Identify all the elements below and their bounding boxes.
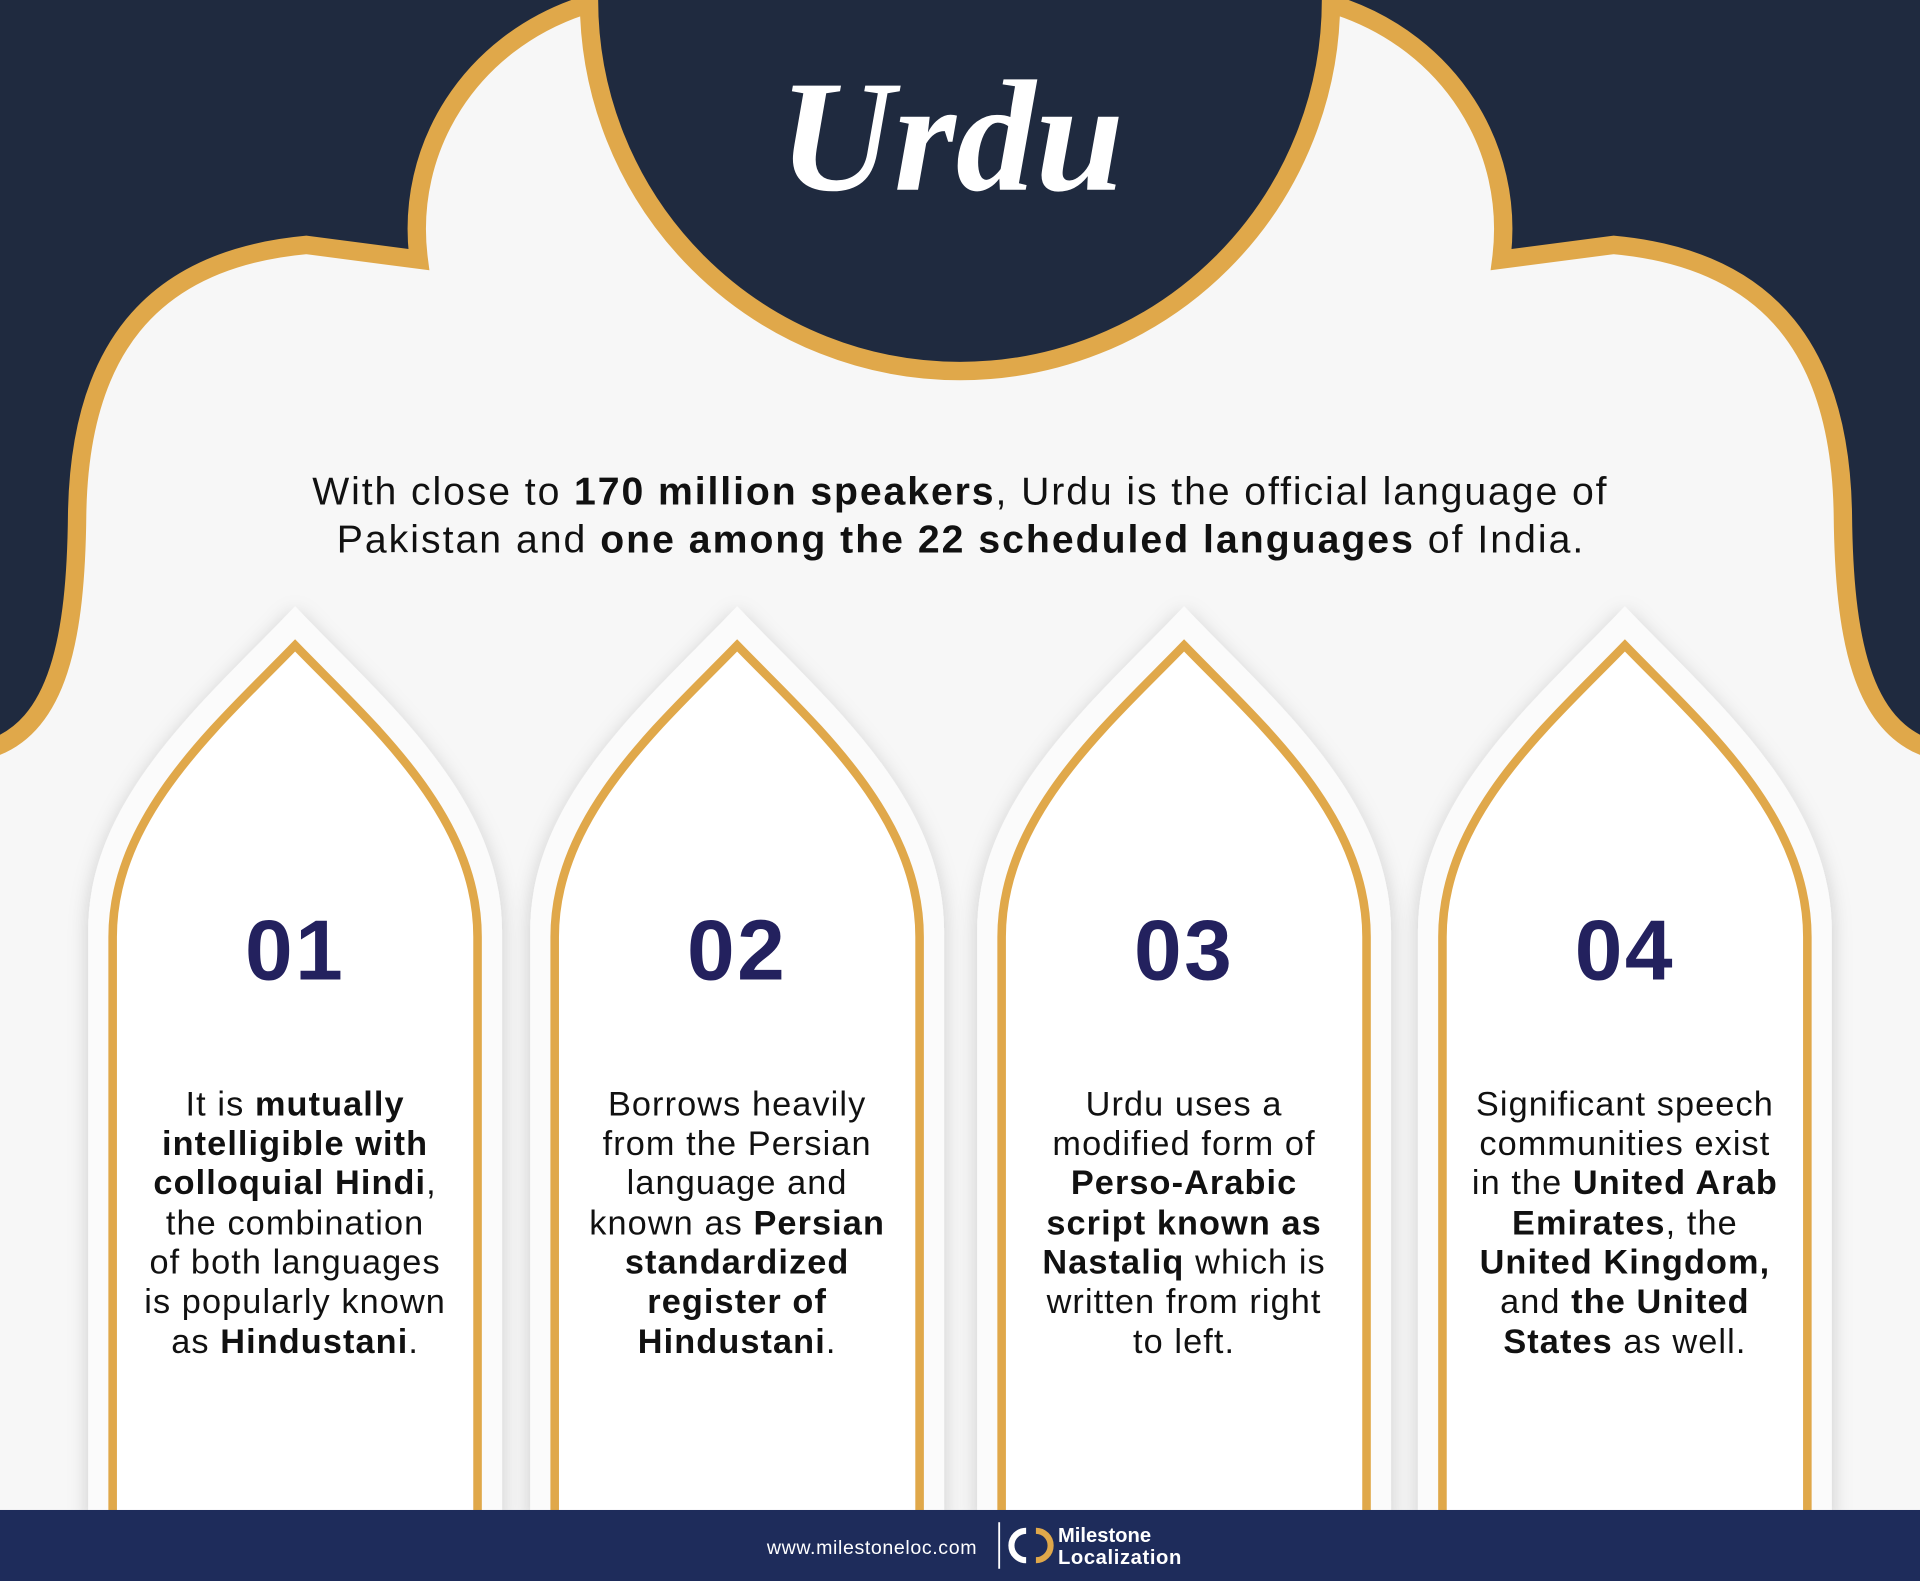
card 3: Nastaliq which is [1042,1244,1326,1282]
card 4: and the United [1500,1283,1750,1321]
card 3: script known as [1046,1204,1322,1242]
card 1: intelligible with [162,1125,428,1163]
website: www.milestoneloc.com [766,1537,977,1559]
card 2: register of [647,1283,827,1321]
intro text [312,471,1607,561]
intro text: Pakistan and one among the 22 scheduled languages of India. [337,518,1583,561]
card 1 [88,606,502,1519]
card 4: 04 [1575,903,1675,999]
card 3: modified form of [1052,1125,1316,1163]
card 4: States as well. [1503,1323,1746,1361]
card 1: colloquial Hindi, [153,1164,437,1202]
logo text: Milestone [1058,1525,1151,1547]
card 2 [530,606,944,1519]
card 3 [977,606,1391,1519]
footer [0,1510,1920,1581]
card 3: 03 [1134,903,1234,999]
card 2: language and [627,1164,848,1202]
card 2: 02 [687,903,787,999]
card 3: Urdu uses a [1086,1086,1283,1124]
title circle [589,0,1331,371]
card 2: standardized [625,1244,849,1282]
card 1: is popularly known [144,1283,446,1321]
card 4: Emirates, the [1512,1204,1738,1242]
card 4: communities exist [1479,1125,1770,1163]
card 1: It is mutually [186,1086,405,1124]
card 1: 01 [245,903,345,999]
intro text: With close to 170 million speakers, Urdu is the official language of [312,471,1607,514]
title: Urdu [779,49,1124,225]
card 2: known as Persian [589,1204,885,1242]
card 4: in the United Arab [1472,1164,1778,1202]
card 4: Significant speech [1476,1086,1774,1124]
card 1: of both languages [150,1244,441,1282]
footer: Localization [1058,1547,1182,1569]
card 2: Borrows heavily [608,1086,866,1124]
card 3: written from right [1046,1283,1322,1321]
card 4: United Kingdom, [1480,1244,1770,1282]
card 3: Perso-Arabic [1071,1164,1297,1202]
card 2: Hindustani. [638,1323,836,1361]
card 4 [1418,606,1832,1519]
card 3: to left. [1133,1323,1235,1361]
card 2: from the Persian [603,1125,872,1163]
card 1: as Hindustani. [171,1323,419,1361]
card 1: the combination [166,1204,424,1242]
logo icon [1011,1531,1051,1560]
